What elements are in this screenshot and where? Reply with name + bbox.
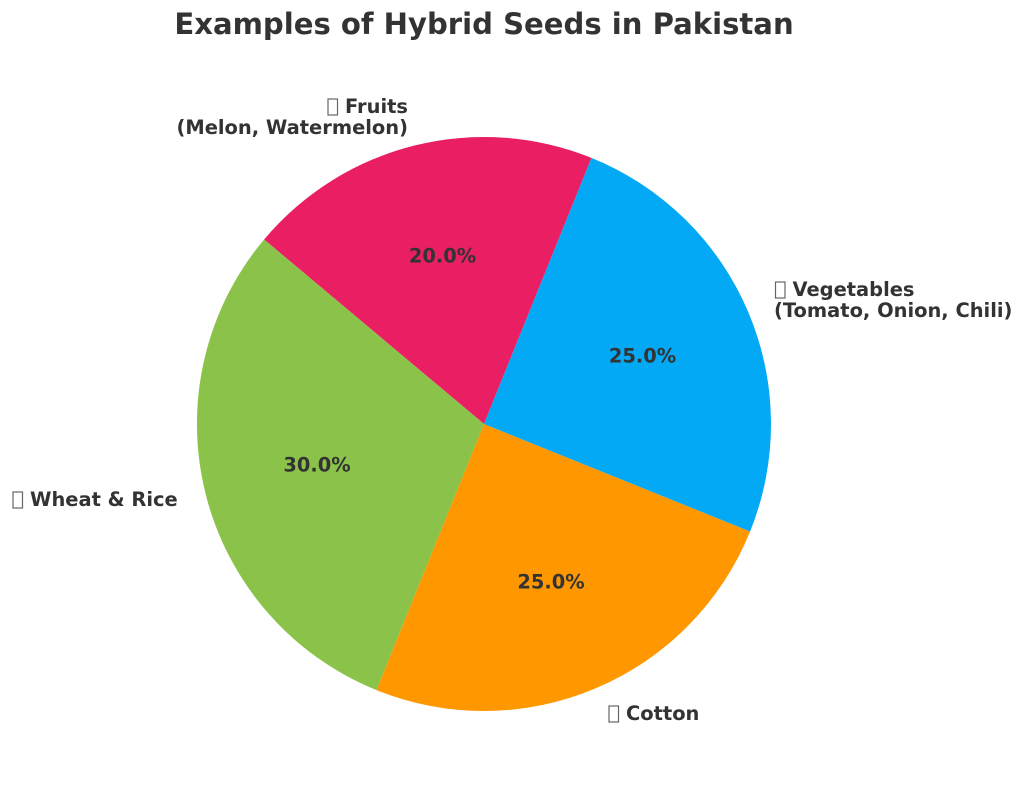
slice: fruits: [264, 137, 592, 424]
label: fruits: [176, 95, 408, 139]
label: vegetables: (Tomato, Onion, Chili): [774, 299, 1012, 322]
percentage: wheat and rice: 30.0%: [283, 454, 351, 476]
icon: missing glyph box: [13, 492, 22, 508]
icon: missing glyph box: [609, 706, 618, 722]
pie chart: [197, 137, 771, 711]
label: cotton: Cotton: [626, 702, 699, 725]
percentage: vegetables: 25.0%: [609, 344, 676, 368]
percentage: fruits: 20.0%: [409, 244, 476, 268]
label: vegetables: [774, 278, 1012, 322]
slice: vegetables: [484, 158, 771, 532]
label: fruits: (Melon, Watermelon): [176, 116, 408, 139]
label: wheat and rice: Wheat & Rice: [30, 488, 178, 511]
percentage: cotton: 25.0%: [517, 570, 585, 594]
title: Examples of Hybrid Seeds in Pakistan: [174, 7, 794, 41]
label: fruits: Fruits: [345, 95, 408, 118]
slice: wheat and rice: [197, 240, 484, 690]
slice: cotton: [376, 424, 750, 711]
icon: missing glyph box: [328, 99, 338, 115]
icon: missing glyph box: [776, 282, 785, 298]
label: vegetables: Vegetables: [792, 278, 914, 301]
